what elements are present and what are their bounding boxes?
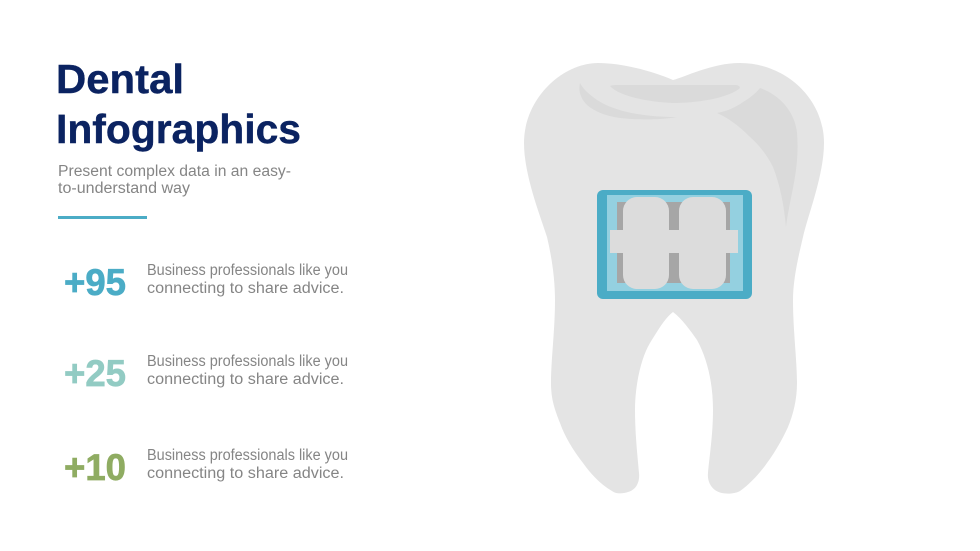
brace outer frame	[597, 190, 752, 299]
crown shading: right highlight	[717, 88, 798, 227]
stat: +95: +95	[64, 262, 126, 303]
stat: +10: Business professionals like you	[147, 447, 348, 464]
subtitle	[58, 163, 291, 197]
stat: +95: Business professionals like you	[147, 262, 348, 279]
left tooth bracket	[623, 197, 669, 289]
stat: +25: +25	[64, 353, 126, 394]
subtitle: to-understand way	[58, 180, 190, 197]
tooth body	[524, 63, 824, 494]
stat: +95: connecting to share advice.	[147, 280, 344, 297]
title	[56, 56, 301, 152]
stat: +25: Business professionals like you	[147, 353, 348, 370]
crown shading: top pit	[610, 85, 740, 103]
horizontal archwire	[610, 230, 738, 253]
right tooth bracket	[679, 197, 726, 289]
crown shading: left groove	[579, 83, 677, 119]
tooth illustration	[524, 63, 824, 494]
stat: +10: +10	[64, 447, 126, 488]
title: Dental	[56, 56, 184, 102]
stat: +95	[64, 262, 348, 303]
dental brace	[597, 190, 752, 299]
stat: +25	[64, 353, 348, 394]
subtitle: Present complex data in an easy-	[58, 163, 291, 180]
stat: +10: connecting to share advice.	[147, 465, 344, 482]
stat: +10	[64, 447, 348, 488]
brace inner panel	[607, 195, 743, 291]
stat: +25: connecting to share advice.	[147, 371, 344, 388]
accent divider	[58, 216, 147, 219]
brace dark backing	[617, 202, 730, 283]
title: Infographics	[56, 106, 301, 152]
